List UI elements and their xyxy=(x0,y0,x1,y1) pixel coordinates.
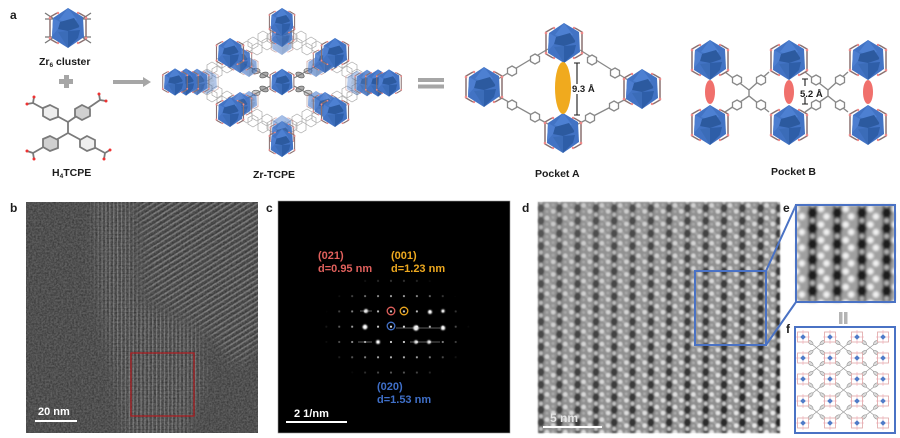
cluster stack: bottom xyxy=(268,115,296,157)
zoom connector lines xyxy=(766,205,796,345)
label: H4TCPE: TCPE xyxy=(63,167,91,179)
marker ring: 001 xyxy=(400,307,408,315)
panel label: d: d xyxy=(522,201,529,215)
scale bar xyxy=(543,426,602,428)
scale label: 2 1/nm xyxy=(294,408,329,420)
selection box xyxy=(695,271,766,345)
structure: Zr-TCPE framework xyxy=(162,8,402,157)
label: Zr6 cluster: cluster xyxy=(53,56,90,68)
linkers xyxy=(498,49,628,124)
label: 021: d=0.95 nm xyxy=(318,263,372,275)
cluster stack: top xyxy=(268,8,296,55)
dimension label: 9.3 Å xyxy=(572,84,595,95)
marker ring: 020 xyxy=(387,322,395,330)
pocket ellipse: yellow xyxy=(555,62,571,114)
label: Zr6 cluster: 6 xyxy=(50,62,54,69)
scale bar xyxy=(286,421,347,423)
linker rings xyxy=(202,31,362,133)
label: Zr6 cluster: Zr xyxy=(39,56,50,68)
label: 021: (021) xyxy=(318,250,344,262)
panel f: simulated structure xyxy=(795,327,895,433)
diffraction spots xyxy=(325,280,468,374)
clusters xyxy=(691,40,887,145)
icon: equivalence bars xyxy=(839,312,848,324)
panel d: HRTEM lattice image xyxy=(538,202,780,433)
dimension label: 5.2 Å xyxy=(800,89,823,100)
panel label: b: b xyxy=(10,201,17,215)
scale bar xyxy=(35,420,77,422)
label: Zr-TCPE: Zr-TCPE xyxy=(253,169,295,181)
marker ring: 021 xyxy=(387,307,395,315)
cluster: center xyxy=(269,69,295,95)
scale label: 20 nm xyxy=(38,406,70,418)
cluster stack: upper right xyxy=(306,38,349,77)
dimension arrow xyxy=(574,63,580,115)
cluster stack: lower left xyxy=(216,91,259,127)
panel label: a: a xyxy=(10,8,17,22)
cluster stack: right xyxy=(345,69,402,97)
scale label: 5 nm xyxy=(550,411,578,425)
clusters xyxy=(465,23,661,153)
structure: Pocket A xyxy=(465,23,661,153)
panel label: c: c xyxy=(266,201,273,215)
pocket ellipses: red xyxy=(705,80,873,104)
icon: equals sign xyxy=(418,78,444,88)
cluster stack: left xyxy=(162,68,219,96)
label: H4TCPE: H xyxy=(52,167,60,179)
panel label: e: e xyxy=(783,201,790,215)
panel b: TEM image xyxy=(26,202,258,433)
arrow: synthesis xyxy=(113,77,151,87)
label: 020: (020) xyxy=(377,381,403,393)
label: Pocket A: Pocket A xyxy=(535,168,580,180)
red selection box xyxy=(131,353,194,416)
label: 001: (001) xyxy=(391,250,417,262)
label: 020: d=1.53 nm xyxy=(377,394,431,406)
clusters xyxy=(796,330,890,430)
panel e: magnified image xyxy=(796,205,895,302)
cluster stack: lower right xyxy=(306,91,349,127)
linkers xyxy=(806,339,880,420)
dimension arrow xyxy=(802,79,808,104)
cluster stack: upper left xyxy=(216,38,259,77)
icon: Zr6 cluster xyxy=(45,8,91,48)
label: Pocket B: Pocket B xyxy=(771,166,816,178)
panel c: FFT pattern xyxy=(278,201,510,433)
panel label: f: f xyxy=(786,322,791,336)
linkers xyxy=(725,72,848,112)
icon: plus sign xyxy=(59,75,73,88)
structure: Pocket B xyxy=(691,40,887,145)
label: 001: d=1.23 nm xyxy=(391,263,445,275)
label: H4TCPE: 4 xyxy=(60,173,64,180)
icon: H4TCPE molecule xyxy=(26,92,112,160)
